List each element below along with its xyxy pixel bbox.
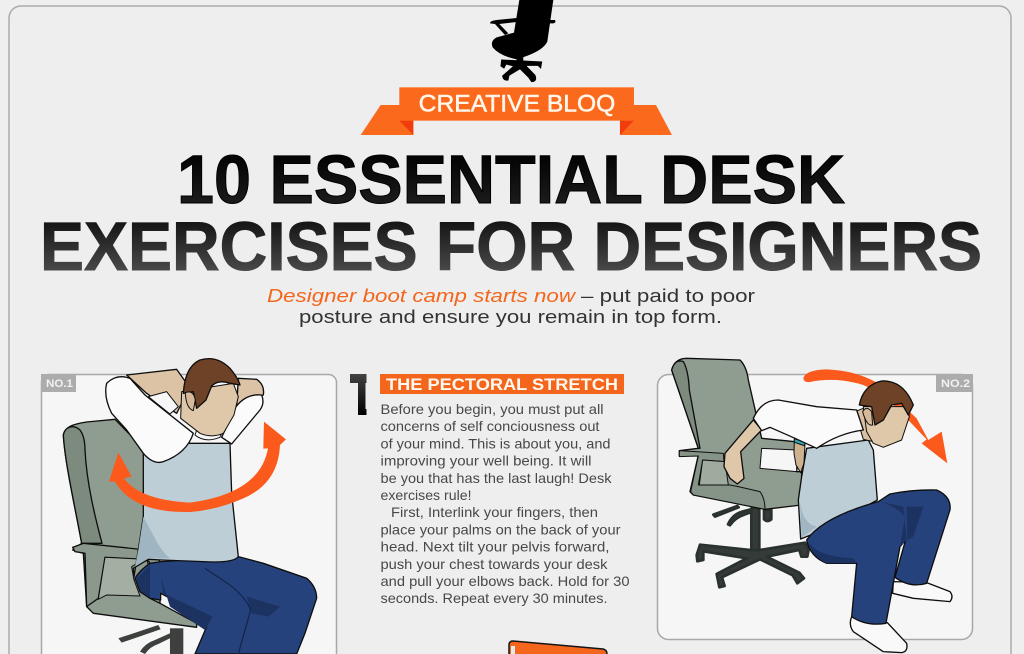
illustration: man stretching on chair <box>63 359 317 654</box>
text block: exercise 1 instructions: head. Next tilt your pelvis forward, <box>380 540 610 554</box>
subtitle <box>267 285 755 327</box>
title: EXERCISES FOR DESIGNERS <box>40 208 982 285</box>
chair: base <box>697 506 809 587</box>
panel: exercise 1 illustration <box>41 359 336 654</box>
figure: jeans <box>807 490 950 624</box>
figure: white sleeve <box>753 400 863 448</box>
heading: The Pectoral Stretch: THE PECTORAL STRETCH <box>386 375 618 394</box>
subtitle: – put paid to poor <box>581 285 755 306</box>
illustration: man leaning forward from chair <box>672 358 952 653</box>
label: No.1 tag <box>41 374 76 392</box>
figure: torso <box>798 440 877 539</box>
label: No.2 tag <box>936 374 973 392</box>
figure: head <box>859 381 913 447</box>
subtitle: Designer boot camp starts now <box>267 285 577 306</box>
label: No.2 tag: NO.2 <box>941 378 970 390</box>
number: 1: 1 <box>344 363 376 428</box>
figure: jeans <box>135 557 317 654</box>
text block: exercise 1 instructions: be you that has the last laugh! Desk <box>380 471 612 486</box>
text block: exercise 1 instructions: place your palms on the back of your <box>380 522 621 538</box>
text block: exercise 1 instructions: push your chest towards your desk <box>380 557 608 572</box>
figure: neck <box>855 408 873 442</box>
arrow: lean direction <box>803 369 947 463</box>
text block: exercise 1 instructions: and pull your elbows back. Hold for 30 <box>380 574 630 589</box>
text block: exercise 1 instructions: improving your well being. It will <box>380 454 592 468</box>
banner: Creative Bloq ribbon <box>361 87 672 135</box>
figure: white sleeves <box>106 377 193 462</box>
text block: exercise 1 instructions: First, Interlink your fingers, then <box>391 505 598 520</box>
text block: exercise 1 instructions: seconds. Repeat every 30 minutes. <box>380 591 608 606</box>
title <box>40 141 982 285</box>
figure: near arm <box>724 420 762 484</box>
figure: white shoes <box>850 582 952 653</box>
label: No.1 tag: NO.1 <box>46 378 73 390</box>
text block: exercise 1 instructions: of your mind. This is about you, and <box>380 436 610 452</box>
icon: office chair silhouette <box>490 0 556 82</box>
figure: forearms <box>127 369 187 413</box>
text block: exercise 1 instructions: Before you begin, you must put all <box>380 402 604 417</box>
banner: Creative Bloq ribbon: CREATIVE BLOQ <box>419 91 615 118</box>
text block: exercise 1 instructions: exercises rule! <box>380 488 472 503</box>
number: 1 <box>350 374 366 415</box>
figure: far hand <box>794 440 805 473</box>
icon: orange book <box>509 641 607 654</box>
chair: back, arm and seat <box>672 358 802 509</box>
arrow: rotate torso <box>109 422 286 512</box>
title: 10 ESSENTIAL DESK <box>177 141 845 218</box>
figure: head <box>181 359 240 440</box>
text block: exercise 1 instructions: concerns of self conciousness out <box>380 419 600 434</box>
figure: torso in light blue shirt <box>133 443 238 577</box>
panel: exercise 2 illustration <box>658 358 973 653</box>
subtitle: posture and ensure you remain in top form. <box>299 306 722 327</box>
text block: exercise 1 instructions <box>380 402 630 606</box>
